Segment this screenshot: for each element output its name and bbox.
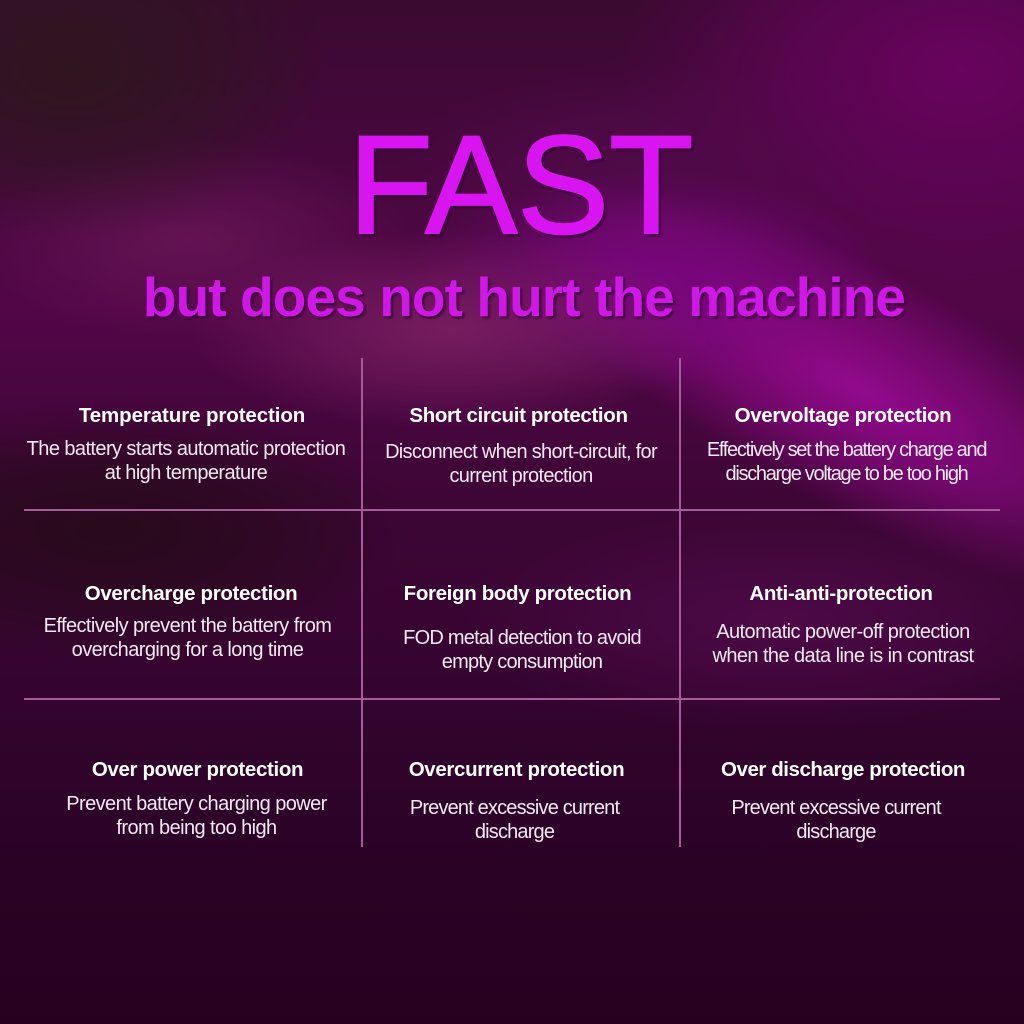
cell: anti-anti-protection	[712, 582, 974, 666]
text: empty consumption	[442, 650, 602, 672]
text: Overvoltage protection	[735, 404, 951, 427]
text: Effectively set the battery charge and	[707, 439, 986, 461]
text: discharge	[796, 820, 876, 842]
cell: foreign body protection	[403, 582, 641, 672]
text: when the data line is in contrast	[712, 644, 974, 666]
text: Prevent battery charging power	[66, 793, 327, 815]
cell: short circuit protection	[385, 404, 658, 486]
text: Overcharge protection	[85, 582, 297, 605]
text: discharge voltage to be too high	[726, 462, 967, 484]
cell: overvoltage protection	[707, 404, 986, 484]
text: Effectively prevent the battery from	[44, 615, 331, 637]
text: Prevent excessive current	[410, 797, 619, 819]
text: Over discharge protection	[721, 758, 965, 781]
text: FOD metal detection to avoid	[403, 627, 641, 649]
text: Automatic power-off protection	[716, 621, 970, 643]
cell: over discharge protection	[721, 758, 965, 842]
text: Over power protection	[92, 758, 303, 781]
text: overcharging for a long time	[72, 638, 303, 660]
text: Prevent excessive current	[731, 797, 941, 819]
title: FAST: FAST	[349, 106, 693, 263]
cell: temperature protection	[27, 404, 345, 484]
text: Overcurrent protection	[409, 758, 624, 781]
cell: over power protection	[66, 758, 327, 838]
cell: overcharge protection	[44, 582, 331, 660]
text: Temperature protection	[79, 404, 305, 427]
text: from being too high	[116, 816, 277, 838]
text: Disconnect when short-circuit, for	[385, 441, 657, 463]
text: Anti-anti-protection	[749, 582, 933, 605]
text: current protection	[449, 464, 593, 486]
text: Foreign body protection	[404, 582, 631, 605]
subtitle: but does not hurt the machine	[143, 266, 905, 328]
text: Short circuit protection	[409, 404, 628, 427]
grid lines	[24, 358, 1000, 847]
text: The battery starts automatic protection	[27, 438, 345, 460]
text: discharge	[475, 820, 554, 842]
cell: overcurrent protection	[409, 758, 624, 842]
text: at high temperature	[105, 462, 267, 484]
